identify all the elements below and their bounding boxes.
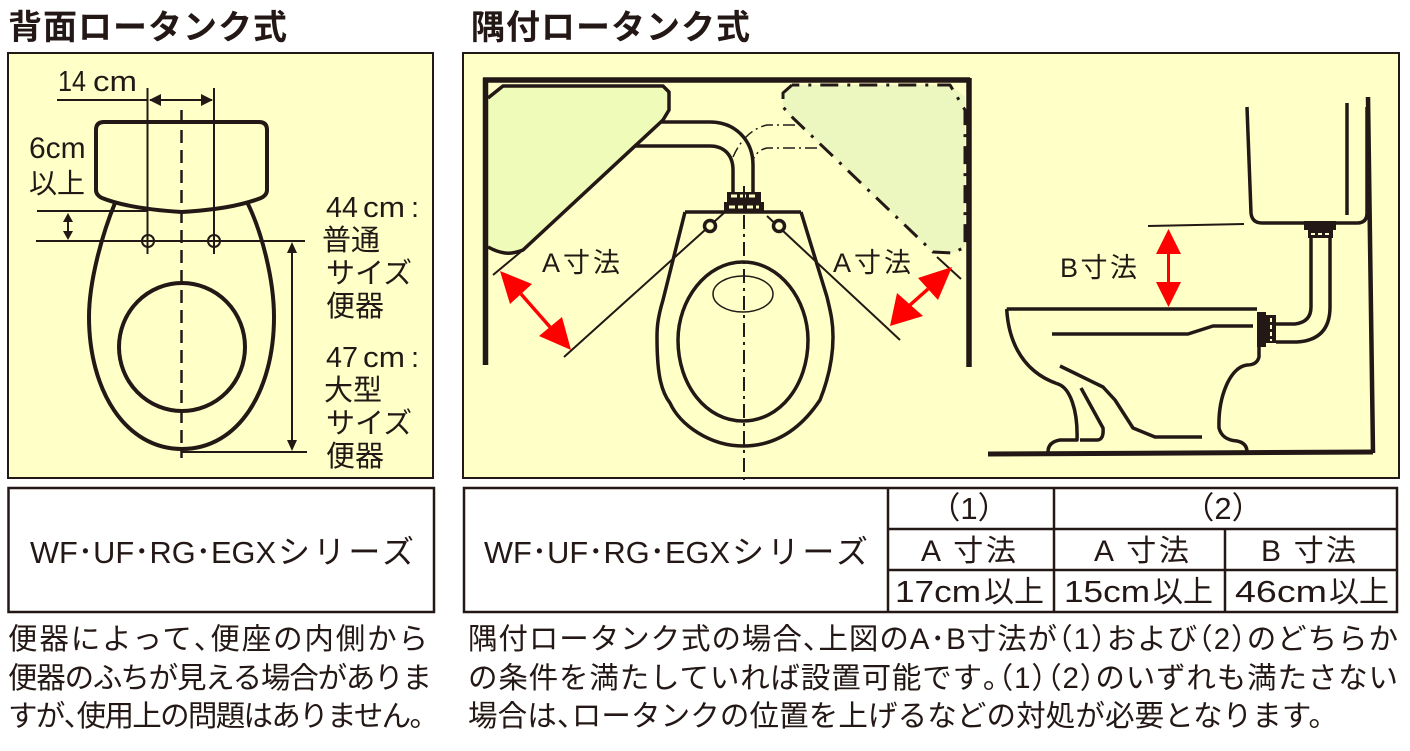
row: dimension values: 15cm bbox=[1064, 574, 1150, 609]
label: A dimension right: A寸法 bbox=[833, 248, 911, 278]
dimension: 6cm or more: 6cm bbox=[29, 132, 86, 165]
arrow: A dimension left bbox=[500, 271, 571, 350]
row: dimension headers: B 寸法 bbox=[1261, 535, 1356, 568]
row: dimension headers bbox=[921, 535, 1356, 568]
table: corner tank series and dimensions bbox=[464, 488, 1397, 612]
text: 44cm normal size: : bbox=[411, 192, 419, 224]
row: dimension values bbox=[895, 574, 1389, 609]
side view: wall bbox=[1368, 97, 1373, 453]
top view: alternative pipe bbox=[733, 125, 817, 160]
row: dimension headers: A 寸法 bbox=[921, 535, 1016, 568]
text: 44cm normal size: 44 bbox=[326, 192, 358, 224]
arrow: A dimension right bbox=[890, 267, 952, 326]
side view: toilet bbox=[1007, 309, 1259, 452]
table: rear tank series bbox=[8, 488, 434, 612]
top view: toilet bowl bbox=[657, 212, 833, 446]
table: rear tank series: シリーズ bbox=[278, 534, 414, 570]
text: 47cm large size bbox=[324, 342, 419, 473]
text block: corner tank note: 場合は、ロータンクの位置を上げるなどの対処が必要となります。 bbox=[468, 700, 1338, 733]
text block: rear tank note bbox=[8, 623, 439, 733]
series name: WF･UF･RG･EGX bbox=[484, 535, 730, 570]
seat opening bbox=[119, 283, 245, 411]
row: condition headers bbox=[929, 491, 1263, 526]
row: dimension values: 17cm bbox=[895, 574, 981, 609]
side view: tank bbox=[1247, 103, 1367, 223]
text: 44cm normal size bbox=[322, 192, 419, 323]
text: 44cm normal size: cm bbox=[363, 192, 405, 224]
top view: seat holes bbox=[704, 220, 784, 232]
text: 47cm large size: 大型 bbox=[324, 374, 382, 407]
top view: walls bbox=[483, 78, 970, 367]
text: 47cm large size: 便器 bbox=[326, 440, 384, 473]
side view: tank flange bbox=[1304, 221, 1336, 238]
dimension: 14cm: cm bbox=[93, 66, 137, 98]
text block: corner tank note: 隅付ロータンク式の場合、上図のA･B寸法が（1）および（2）のどちらか bbox=[468, 623, 1398, 656]
text block: rear tank note: すが、使用上の問題はありません。 bbox=[8, 700, 439, 733]
text block: corner tank note: の条件を満たしていれば設置可能です。（1）（2）のいずれも満たさない bbox=[468, 662, 1398, 695]
row: condition headers: （2） bbox=[1183, 491, 1263, 526]
side view: water pipe bbox=[1276, 238, 1330, 342]
row: condition headers: （1） bbox=[929, 491, 1009, 526]
top view: corner tank, solid bbox=[487, 85, 669, 253]
table: rear tank series: WF･UF･RG･EGX bbox=[30, 535, 276, 570]
text block: rear tank note: 便器によって、便座の内側から bbox=[8, 623, 428, 656]
tank outline bbox=[96, 122, 267, 212]
label: A dimension left: A寸法 bbox=[542, 248, 620, 278]
arrow: B dimension bbox=[1156, 229, 1181, 307]
row: dimension values: 以上 bbox=[1329, 576, 1389, 609]
table: corner tank series and dimensions: シリーズ bbox=[732, 534, 868, 570]
text: 44cm normal size: 便器 bbox=[326, 290, 384, 323]
text: 44cm normal size: サイズ bbox=[326, 257, 412, 290]
heading: corner tank type: 隅付ロータンク式 bbox=[471, 9, 750, 47]
text: 44cm normal size: 普通 bbox=[322, 224, 380, 257]
text: 47cm large size: : bbox=[411, 342, 419, 374]
side view: toilet flange bbox=[1257, 312, 1276, 347]
row: dimension values: 46cm bbox=[1235, 574, 1327, 609]
row: dimension values: 以上 bbox=[1153, 576, 1213, 609]
side view: reference line bbox=[1148, 224, 1244, 226]
text: 47cm large size: 47 bbox=[326, 342, 358, 374]
dimension: seat length bbox=[182, 242, 307, 452]
text block: corner tank note bbox=[468, 623, 1398, 733]
panel: corner tank diagrams bbox=[463, 53, 1399, 480]
dimension: 6cm or more bbox=[29, 132, 305, 241]
text: 47cm large size: cm bbox=[363, 342, 405, 374]
dimension: 14cm bbox=[57, 66, 214, 254]
center line bbox=[180, 110, 183, 458]
top view: center line bbox=[743, 188, 745, 480]
panel: rear tank diagram bbox=[8, 53, 433, 478]
top view: reference lines bbox=[493, 212, 961, 357]
heading: rear tank type: 背面ロータンク式 bbox=[8, 9, 287, 47]
mounting holes bbox=[142, 235, 220, 247]
row: dimension values: 以上 bbox=[984, 576, 1044, 609]
label: B dimension: B寸法 bbox=[1060, 253, 1137, 283]
side view: floor bbox=[988, 452, 1373, 454]
text: 47cm large size: サイズ bbox=[326, 407, 412, 440]
top view: bowl water hole bbox=[713, 276, 773, 312]
row: dimension headers: A 寸法 bbox=[1094, 535, 1189, 568]
top view: pipe flange bbox=[724, 186, 764, 212]
top view: water pipe bbox=[635, 122, 753, 192]
top view: bowl opening bbox=[678, 262, 808, 421]
dimension: 14cm: 14 bbox=[58, 66, 86, 98]
dimension: 6cm or more: 以上 bbox=[29, 168, 85, 199]
top view: corner tank, alternative bbox=[783, 85, 965, 253]
toilet seat outline bbox=[89, 202, 274, 449]
text block: rear tank note: 便器のふちが見える場合がありま bbox=[8, 662, 432, 695]
